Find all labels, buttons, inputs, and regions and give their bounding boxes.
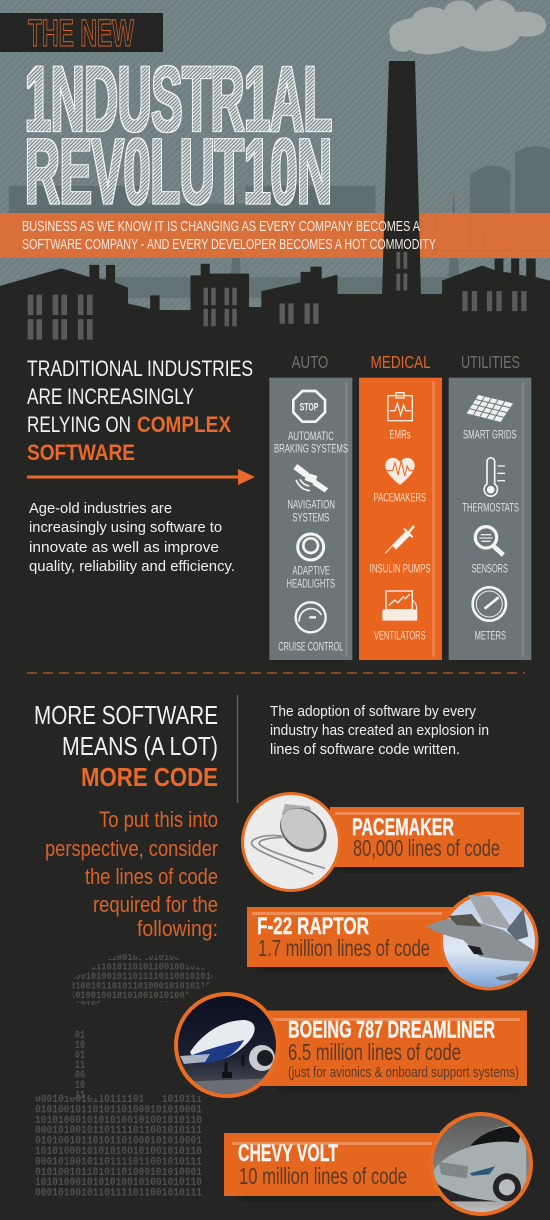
label: thermostats: THERMOSTATS [462, 500, 519, 514]
Chevy Volt title: CHEVY VOLT [238, 1140, 338, 1167]
label: automatic braking systems: AUTOMATIC [288, 429, 334, 443]
icon: syringe [385, 526, 414, 553]
icon: stop sign [293, 391, 325, 422]
label: adaptive headlights [287, 564, 335, 590]
binary code cloud: 0010111010110101100100101101 [70, 962, 216, 974]
factory chimney [382, 61, 421, 295]
intro paragraph [29, 500, 235, 575]
factory silhouettes [0, 259, 550, 347]
card: F-22 Raptor [247, 892, 538, 990]
pacemaker title: PACEMAKER [352, 814, 454, 841]
label: insulin pumps: INSULIN PUMPS [370, 561, 431, 575]
panel: auto [269, 352, 352, 660]
icon: stop sign: STOP [300, 402, 319, 414]
utilities heading: UTILITIES [461, 352, 520, 372]
label: adaptive headlights: ADAPTIVE [292, 564, 330, 578]
card: pacemaker [241, 792, 524, 892]
photo: Boeing plane [174, 992, 280, 1100]
section heading: traditional industries [27, 356, 253, 465]
photo: Chevy Volt car [429, 1112, 533, 1216]
icon: ventilator [382, 591, 417, 621]
perspective paragraph: the lines of code [85, 864, 218, 889]
binary code factory: 00 [75, 1070, 85, 1082]
label: automatic braking systems: BRAKING SYSTEMS [274, 442, 348, 456]
binary code cloud: 1001010010110111101100101010 [70, 971, 216, 983]
perspective paragraph: perspective, consider [45, 836, 218, 861]
binary code factory: 11 [75, 1060, 85, 1072]
intro paragraph: quality, reliability and efficiency. [29, 558, 235, 575]
label: navigation systems: SYSTEMS [292, 511, 329, 525]
label: pacemakers: PACEMAKERS [374, 490, 426, 504]
binary code factory: 10101000101010100101001010110 [35, 1115, 202, 1127]
cloud of smoke [389, 0, 546, 54]
adoption paragraph: industry has created an explosion in [270, 723, 489, 739]
section heading: more code: MORE CODE [81, 762, 218, 792]
intro paragraph: Age-old industries are [29, 500, 172, 517]
binary code factory: 10 [75, 1080, 85, 1092]
binary code factory: 11 [75, 1090, 85, 1102]
binary code cloud: 1010010010101001010100101010 [70, 990, 216, 1002]
perspective paragraph: following: [137, 916, 218, 941]
label: smart grids: SMART GRIDS [463, 428, 517, 442]
binary code factory: 01 [75, 1050, 85, 1062]
adoption paragraph: The adoption of software by every [270, 704, 477, 720]
section heading: traditional industries: ARE INCREASINGLY [27, 384, 194, 409]
section heading: traditional industries: SOFTWARE [27, 440, 135, 465]
icon: headlight [298, 534, 324, 560]
heading: The New: THE NEW [28, 13, 134, 55]
section heading: traditional industries: TRADITIONAL INDUSTRIES [27, 356, 253, 381]
binary code factory: 01010010110101101000101010001 [35, 1104, 202, 1116]
auto heading: AUTO [292, 352, 328, 372]
perspective paragraph: required for the [93, 892, 218, 917]
binary code factory: 01 [75, 1030, 85, 1042]
binary code factory: 00010100101101111011001010111 [35, 1188, 202, 1200]
label: navigation systems [287, 497, 335, 525]
intro paragraph: increasingly using software to [29, 519, 222, 536]
orange sub-header band [0, 213, 550, 258]
label: adaptive headlights: HEADLIGHTS [287, 576, 335, 590]
section heading: more code [34, 700, 218, 792]
panel: medical [359, 352, 442, 660]
label: automatic braking systems [274, 429, 348, 456]
icon: thermometer [484, 458, 505, 496]
label: navigation systems: NAVIGATION [287, 497, 335, 511]
binary code factory: 10101000101010100101001010110 [35, 1146, 202, 1158]
label: meters: METERS [475, 629, 506, 643]
intro paragraph: innovate as well as improve [29, 539, 219, 556]
binary code factory: 00010100101101111011001010111 [35, 1156, 202, 1168]
binary code cloud: 0101001011010010110100101011 [70, 1000, 216, 1012]
label: ventilators: VENTILATORS [374, 629, 426, 643]
binary code cloud [72, 954, 212, 1006]
binary code factory: 00010100101101111011001010111 [35, 1094, 202, 1106]
binary code cloud: 1011010110010110101001011010 [70, 952, 216, 964]
factory windows [28, 252, 527, 340]
binary code factory: 10 [75, 1040, 85, 1052]
binary code factory: 00010100101101111011001010111 [35, 1125, 202, 1137]
arrow [27, 469, 255, 485]
perspective paragraph [45, 807, 218, 941]
section heading: more code: MORE SOFTWARE [34, 700, 218, 730]
adoption paragraph: lines of software code written. [270, 742, 460, 758]
medical heading: MEDICAL [371, 352, 431, 372]
icon: cruise control dial [296, 602, 326, 632]
F-22 lines of code: 1.7 million lines of code [258, 935, 430, 961]
perspective paragraph: To put this into [99, 807, 218, 832]
photo: pacemaker [241, 792, 341, 892]
heading: The New [0, 13, 163, 55]
title: Industrial Revolution [25, 48, 332, 223]
icon: satellite [293, 464, 328, 492]
section heading: traditional industries: RELYING ON [27, 412, 131, 437]
binary code factory: 01010010110101101000101010001 [35, 1167, 202, 1179]
header subtitle [22, 218, 436, 253]
adoption paragraph [270, 704, 489, 758]
card: Chevy Volt [224, 1112, 533, 1216]
binary code cloud: 0100101101011010001010101100 [70, 980, 216, 992]
Boeing lines of code: 6.5 million lines of code [288, 1039, 461, 1065]
icon: magnifier [475, 527, 503, 555]
icon: meter gauge [473, 587, 506, 621]
panel: utilities [449, 352, 531, 660]
label: EMRs: EMRs [389, 428, 411, 442]
icon: solar grid [467, 395, 513, 422]
binary code factory: 10101000101010100101001010110 [35, 1177, 202, 1189]
header illustration: factory skyline [0, 0, 550, 347]
Chevy Volt lines of code: 10 million lines of code [239, 1163, 407, 1189]
card: Boeing 787 Dreamliner [174, 992, 527, 1100]
binary code factory [35, 1030, 202, 1200]
section heading: traditional industries: COMPLEX [137, 412, 231, 437]
F-22 title: F-22 RAPTOR [257, 913, 369, 940]
icon: heart with pulse [385, 458, 415, 485]
label: cruise control: CRUISE CONTROL [278, 640, 344, 654]
icon: medical chart [388, 393, 412, 421]
distant city [9, 146, 550, 298]
photo: fighter jet [427, 892, 538, 990]
label: sensors: SENSORS [472, 561, 508, 575]
section heading: more code: MEANS (A LOT) [62, 731, 218, 761]
binary code factory: 01010010110101101000101010001 [35, 1136, 202, 1148]
